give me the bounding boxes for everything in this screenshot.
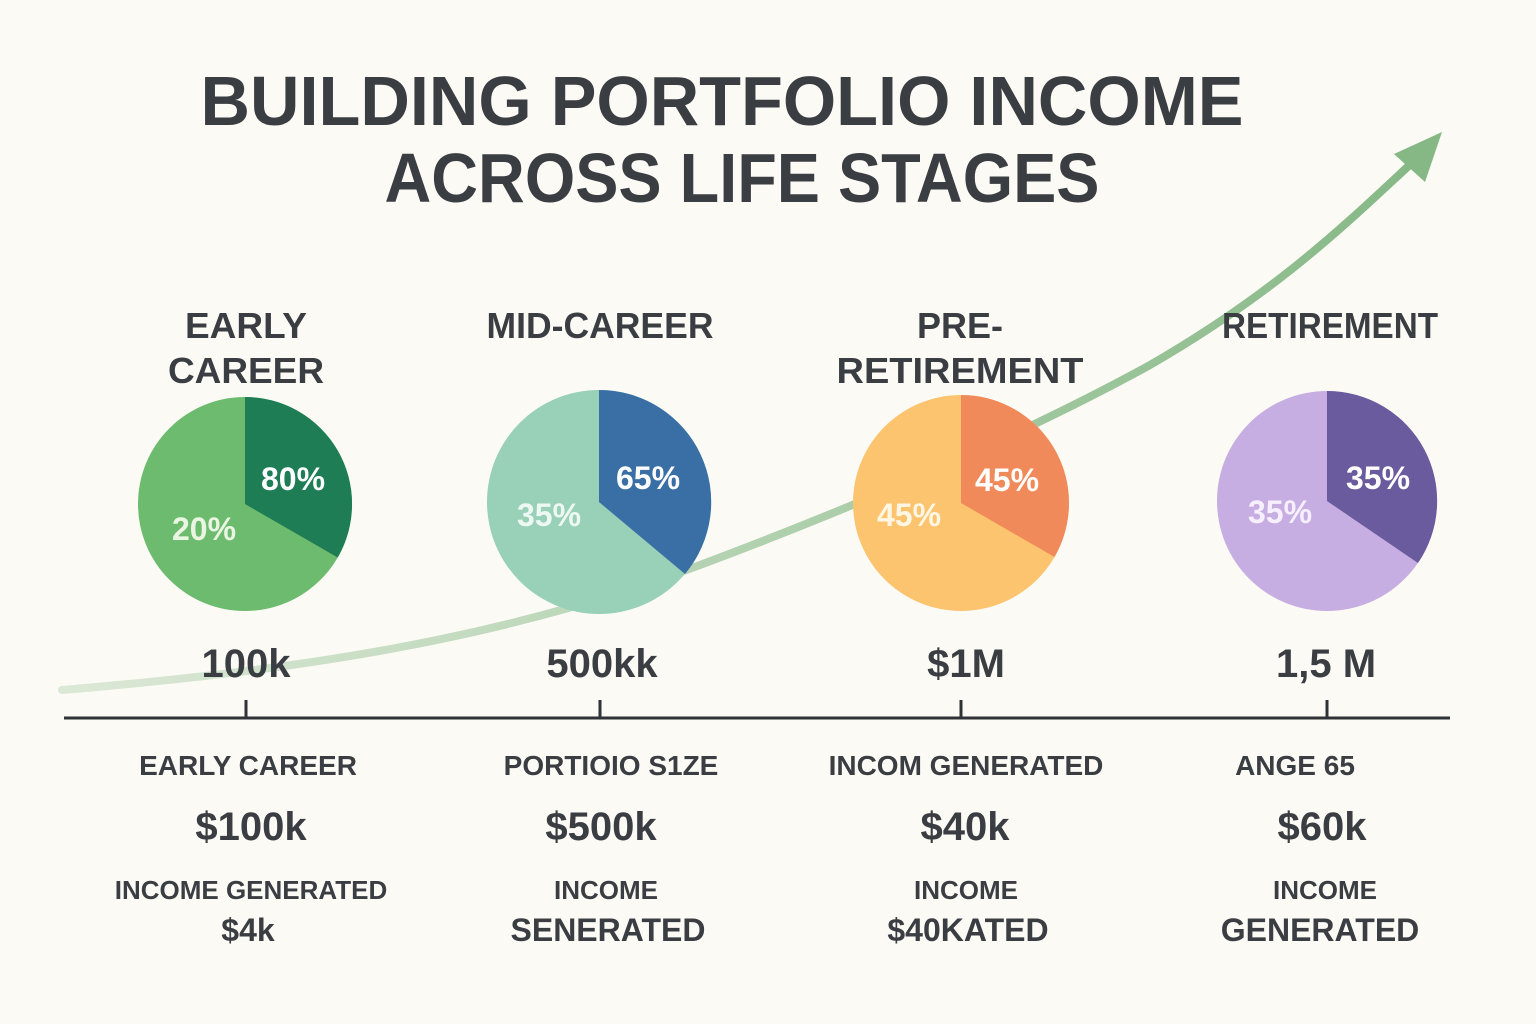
pie: early career: 80% [261,461,325,497]
income generated notes [115,875,1419,948]
pie: mid-career [487,390,711,614]
pie: retirement [1217,391,1437,611]
bottom values: $100k [195,805,307,849]
portfolio amounts: 500kk [546,642,658,686]
income generated notes: $40KATED [887,912,1049,948]
bottom values: $60k [1278,805,1367,849]
portfolio amounts [202,642,1376,686]
income generated notes: SENERATED [511,912,705,948]
pie: retirement: 35% [1346,460,1410,496]
income generated notes: $4k [221,912,275,948]
timeline axis [64,700,1450,718]
stage labels: CAREER [168,350,324,391]
income generated notes: INCOME GENERATED [115,875,387,905]
stage labels [168,305,1438,391]
title [200,62,1244,217]
pie: mid-career: 65% [616,460,680,496]
pie: mid-career: 35% [517,497,581,533]
pie: pre-retirement [853,395,1069,611]
income generated notes: INCOME [1273,875,1377,905]
stage labels: RETIREMENT [836,350,1084,391]
bottom labels: PORTIOIO S1ZE [504,750,718,781]
income generated notes: INCOME [554,875,658,905]
portfolio amounts: $1M [927,642,1005,686]
pie: early career: 20% [172,511,236,547]
income generated notes: GENERATED [1221,912,1419,948]
portfolio amounts: 1,5 M [1276,642,1376,686]
bottom labels: ANGE 65 [1235,750,1355,781]
title: BUILDING PORTFOLIO INCOME [200,62,1244,140]
bottom labels: INCOM GENERATED [829,750,1103,781]
pie: pre-retirement: 45% [975,462,1039,498]
bottom values: $40k [921,805,1010,849]
bottom values: $500k [545,805,657,849]
bottom labels: EARLY CAREER [139,750,357,781]
portfolio amounts: 100k [202,642,291,686]
bottom values [195,805,1367,849]
stage labels: MID-CAREER [486,305,714,346]
bottom labels [139,750,1355,781]
stage labels: PRE- [917,305,1003,346]
stage labels: RETIREMENT [1222,305,1438,346]
title: ACROSS LIFE STAGES [384,139,1100,217]
pie: retirement: 35% [1248,494,1312,530]
income generated notes: INCOME [914,875,1018,905]
stage labels: EARLY [185,305,307,346]
pie: early career [138,397,352,611]
pie: pre-retirement: 45% [877,497,941,533]
growth arrow [62,132,1442,690]
